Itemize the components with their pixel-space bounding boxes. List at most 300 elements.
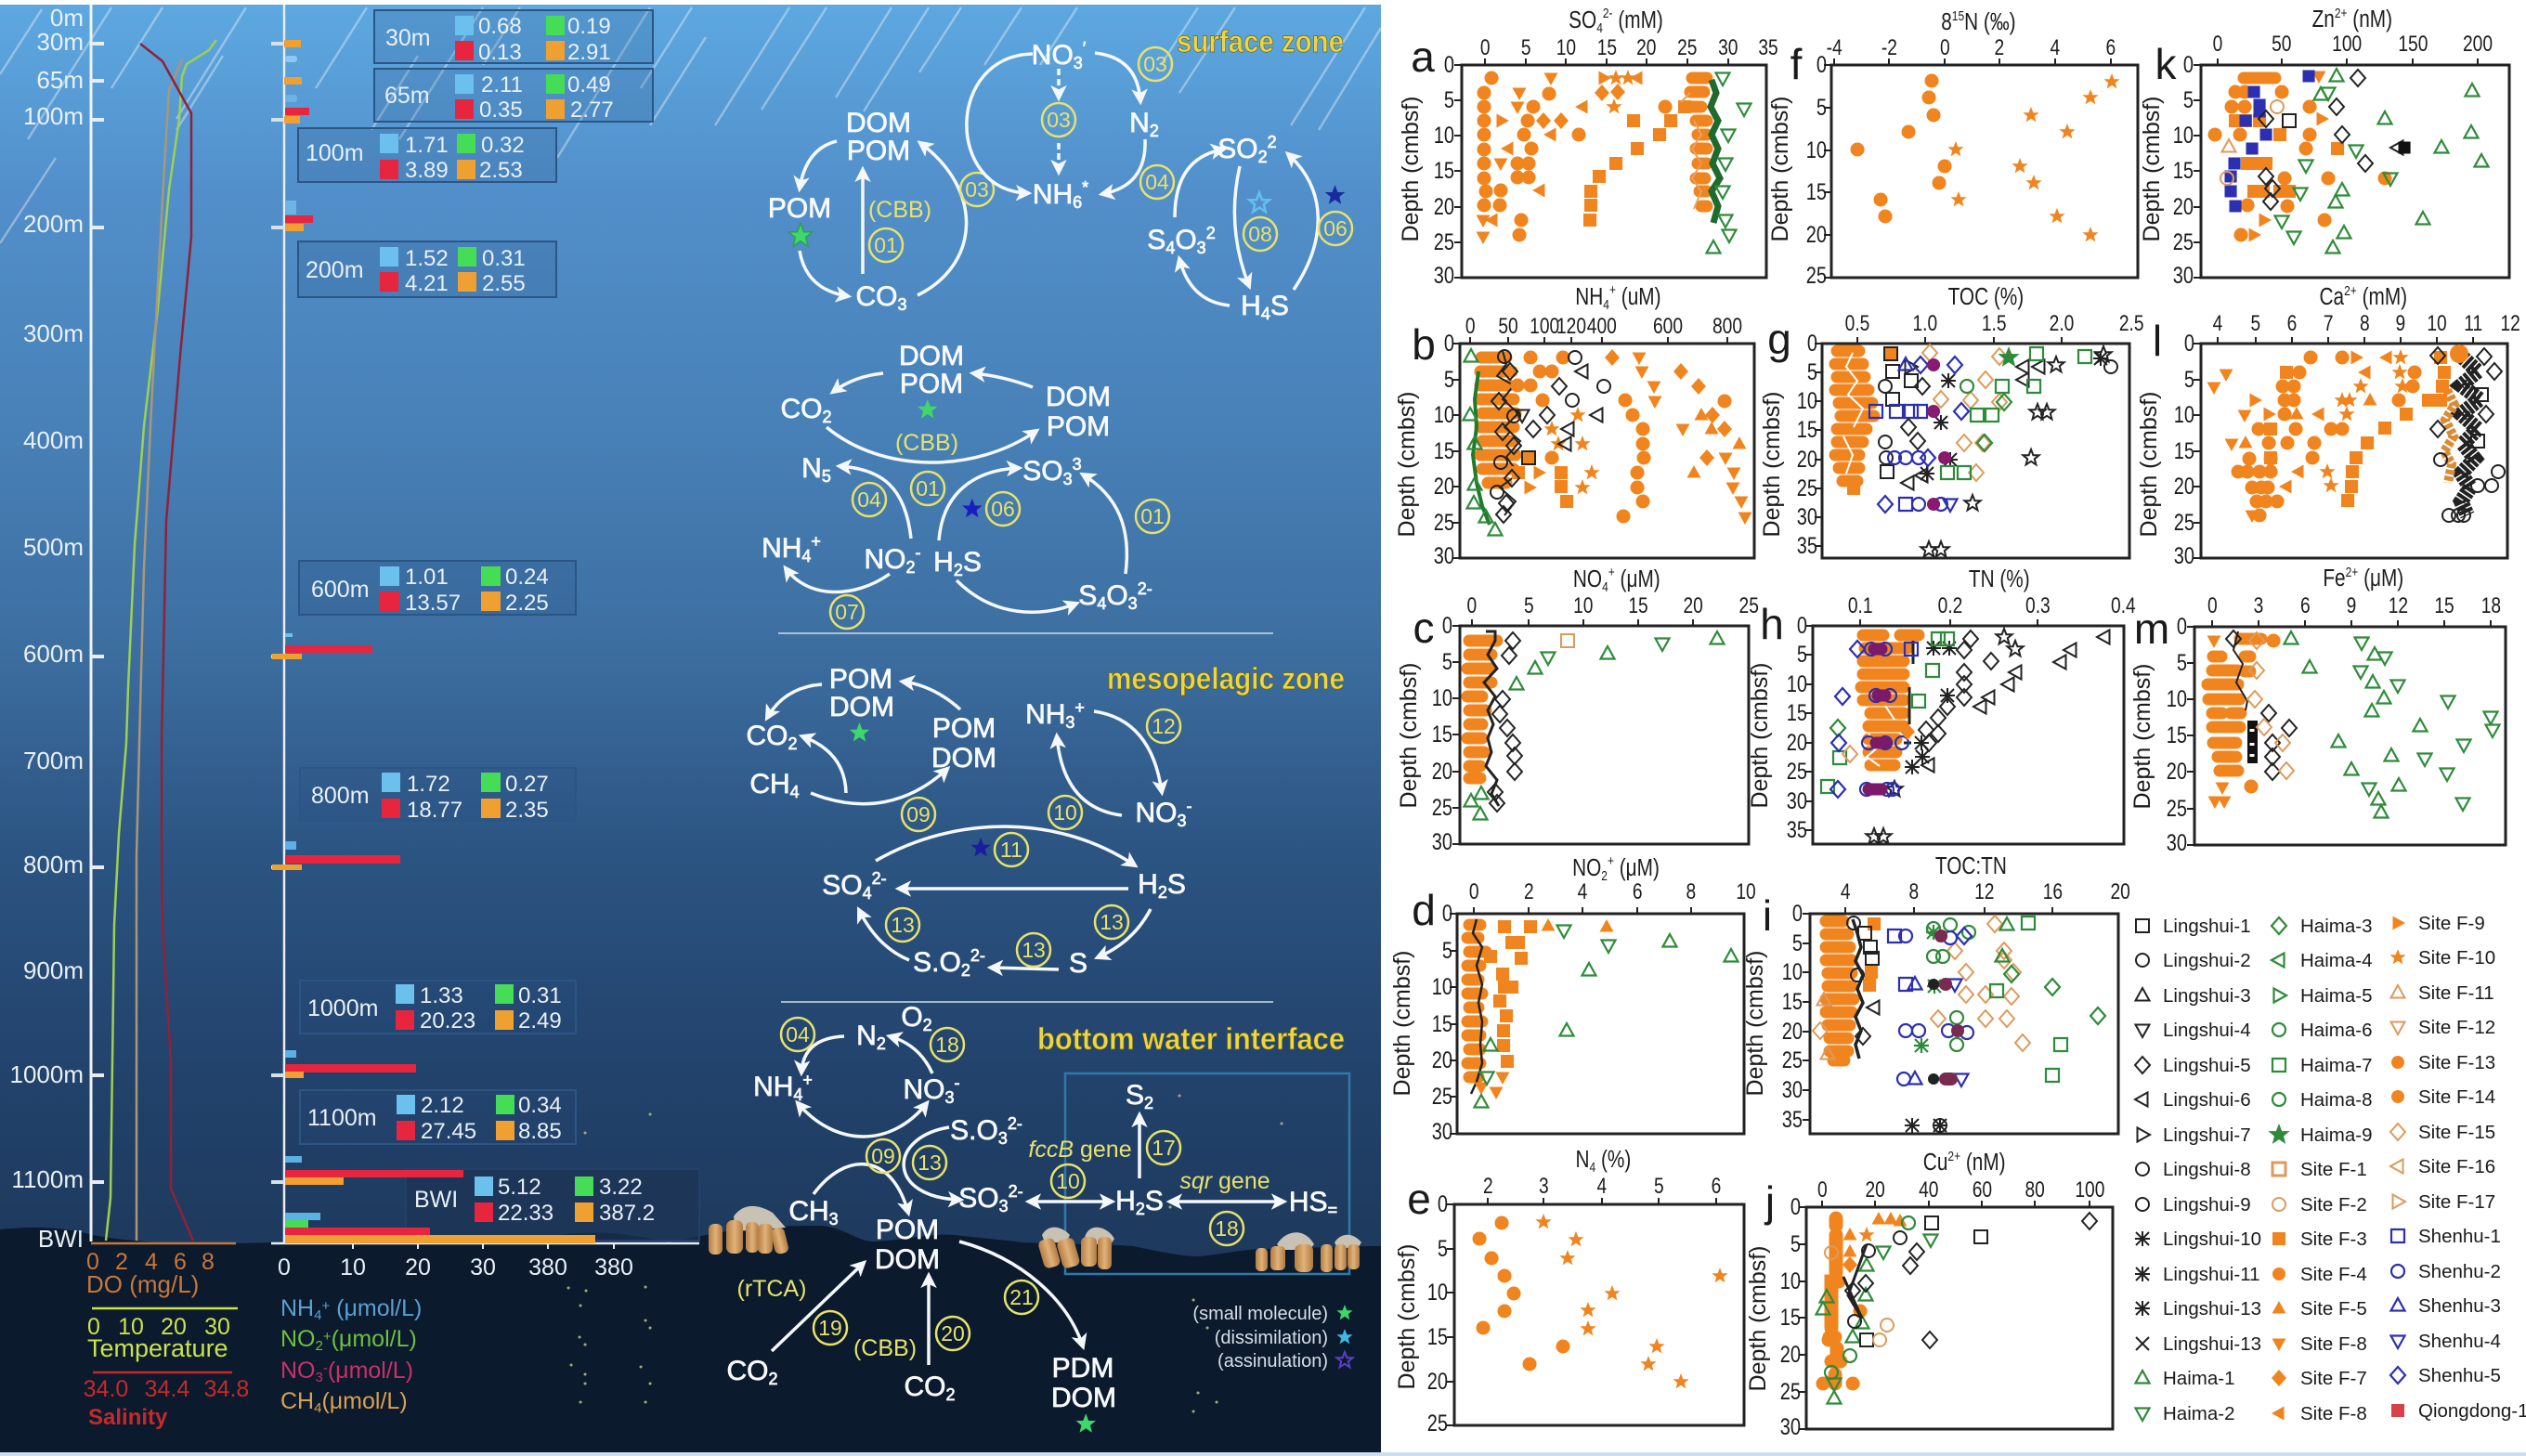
depth scale: 300m <box>23 319 84 347</box>
depth ticks: 15 <box>2174 438 2194 464</box>
icon: dissimilation star <box>1249 193 1270 212</box>
depth ticks: 10 <box>2174 402 2194 428</box>
axis text: 600 <box>1653 313 1683 339</box>
panel m: iron <box>2129 565 2506 856</box>
depth ticks: 10 <box>1434 402 1454 428</box>
step badges: 12 <box>1152 714 1176 738</box>
panel k: zinc <box>2139 6 2509 289</box>
depth ticks <box>2174 331 2194 569</box>
data box 1000m: 2.49 <box>518 1008 562 1034</box>
depth ticks: 0 <box>1790 1194 1801 1220</box>
step badges <box>781 1018 1243 1350</box>
axis text <box>1465 282 1742 339</box>
data box 1000m: 20.23 <box>420 1008 475 1034</box>
nutrient legend: NH <box>280 1295 314 1321</box>
data box 30m: 0.19 <box>567 14 611 39</box>
labels: NH <box>1025 699 1065 730</box>
labels: 2 <box>1144 1094 1153 1112</box>
axis text: 25 <box>1739 592 1759 618</box>
panel l: calcium <box>2136 283 2520 569</box>
legend column 1: Lingshui-3 <box>2163 985 2251 1007</box>
labels: S <box>963 547 982 578</box>
axis text: 2.0 <box>2050 310 2074 336</box>
chart frame <box>2201 65 2509 278</box>
step badges: 19 <box>818 1316 842 1340</box>
depth ticks: 20 <box>1780 1342 1801 1368</box>
axis text: 2 <box>1524 878 1534 904</box>
legend column 3: Site F-10 <box>2418 947 2495 968</box>
labels: 2 <box>954 561 963 579</box>
step badges <box>869 173 994 262</box>
depth scale: 800m <box>23 851 84 878</box>
icon: green star <box>1075 1413 1096 1433</box>
depth ticks: 30 <box>1782 1077 1803 1103</box>
labels: 2 <box>961 961 970 980</box>
depth ticks: 35 <box>1797 533 1817 559</box>
axis text: 6 <box>2105 34 2116 60</box>
depth ticks <box>1782 901 1803 1133</box>
legend column 2: Site F-1 <box>2300 1159 2367 1180</box>
depth ticks <box>1434 52 1454 289</box>
labels: 2 <box>905 558 916 577</box>
data points <box>2215 69 2489 253</box>
labels: 2 <box>822 408 832 426</box>
depth ticks: 10 <box>1434 123 1454 149</box>
axis text <box>2213 6 2493 57</box>
axis text: 0 <box>1940 34 1950 60</box>
depth ticks: 10 <box>1780 1268 1801 1294</box>
labels: sqr gene <box>1179 1168 1270 1194</box>
legend column 3: Shenhu-2 <box>2418 1261 2501 1282</box>
labels: POM <box>847 136 910 166</box>
axis text: 0.2 <box>1938 592 1962 618</box>
depth ticks: 20 <box>2167 759 2187 785</box>
axis text: 50 <box>1498 313 1518 339</box>
panel letter: c <box>1413 604 1434 652</box>
labels: CO <box>726 1356 768 1386</box>
axis text: TN (%) <box>1969 566 2030 592</box>
step badges: 20 <box>941 1321 965 1346</box>
labels: NO <box>1135 798 1177 828</box>
data box 200m: 200m <box>306 257 364 283</box>
step badges: 03 <box>1047 108 1071 132</box>
step badges: 06 <box>991 497 1015 521</box>
legend column 2: Site F-8 <box>2300 1333 2367 1355</box>
axis text <box>1848 566 2136 618</box>
labels: 6 <box>1073 193 1082 212</box>
panel letter: g <box>1767 315 1791 363</box>
depth ticks: 25 <box>1782 1047 1803 1073</box>
data box 1100m: 0.34 <box>518 1093 562 1118</box>
depth ticks: 20 <box>1797 447 1817 473</box>
nutrient bar chart: 380 <box>528 1254 567 1280</box>
salinity axis: 34.4 <box>145 1376 189 1402</box>
labels: 3 <box>1177 812 1187 830</box>
axis text: 0 <box>2207 592 2218 618</box>
y axis label: Depth (cmbsf) <box>1396 663 1422 808</box>
axis text: 2 <box>1994 34 2004 60</box>
depth ticks: 15 <box>2167 722 2187 748</box>
legend column 1: Lingshui-2 <box>2163 950 2251 971</box>
chart frame <box>2201 344 2507 558</box>
depth ticks: 10 <box>1432 974 1452 1000</box>
depth ticks: 30 <box>1797 504 1817 530</box>
depth ticks: 25 <box>1806 263 1827 289</box>
legend column 2: Site F-3 <box>2300 1228 2367 1250</box>
data box 100m <box>298 128 556 183</box>
axis text: 0 <box>1817 1176 1828 1202</box>
step badges <box>1243 212 1352 251</box>
temperature axis <box>87 1308 238 1362</box>
axis text: 25 <box>1677 34 1697 60</box>
panel j: copper <box>1745 1149 2113 1440</box>
legend column 1: Lingshui-6 <box>2163 1089 2251 1111</box>
axis text: 80 <box>2025 1176 2045 1202</box>
zone title: bottom water interface: bottom water interface <box>1037 1021 1345 1056</box>
depth scale: 100m <box>23 102 84 130</box>
depth scale: 30m <box>36 28 84 56</box>
labels: S <box>1270 291 1289 321</box>
axis text: NO <box>1573 566 1602 592</box>
legend column 2: Site F-5 <box>2300 1298 2367 1320</box>
labels: 2 <box>1206 224 1216 242</box>
arrows <box>767 682 1162 969</box>
axis text: 8 <box>1941 8 1952 35</box>
step badges: 08 <box>1248 222 1272 246</box>
labels: SO <box>1022 456 1063 487</box>
labels: NH <box>1033 179 1073 210</box>
step badges: 04 <box>857 488 881 512</box>
axis text: 8 <box>1686 878 1696 904</box>
nutrient bar chart: 380 <box>594 1254 633 1280</box>
axis text: 0 <box>2213 31 2222 57</box>
axis text <box>2213 283 2520 336</box>
data points <box>1835 344 2117 556</box>
chart frame <box>1460 344 1754 558</box>
salinity axis: Salinity <box>88 1405 168 1430</box>
data box 1100m: 27.45 <box>421 1119 476 1144</box>
axis text: 15 <box>1628 592 1648 618</box>
depth ticks: 15 <box>1432 1011 1452 1037</box>
depth ticks: 0 <box>1816 52 1827 78</box>
labels: 3 <box>1073 455 1082 474</box>
axis text: (mM) <box>1613 6 1663 33</box>
axis text: 9 <box>2395 310 2405 336</box>
legend column 2: Haima-5 <box>2300 985 2372 1007</box>
axis text: 4 <box>1590 1160 1596 1175</box>
labels: 4 <box>1261 305 1270 323</box>
chart frame <box>1813 626 2124 844</box>
axis text: 12 <box>1974 878 1994 904</box>
data box 30m: 30m <box>385 25 431 51</box>
legend column 1: Lingshui-13 <box>2163 1333 2261 1355</box>
y axis label: Depth (cmbsf) <box>1394 1244 1420 1389</box>
axis text: 10 <box>1573 592 1593 618</box>
depth ticks: 5 <box>1790 1231 1801 1257</box>
labels: H <box>1115 1186 1136 1216</box>
depth scale: 0m <box>50 4 84 32</box>
depth ticks: 15 <box>1427 1324 1448 1350</box>
data box 1100m: 2.12 <box>421 1093 464 1118</box>
depth ticks: 0 <box>2177 614 2187 640</box>
data box 600m: 2.25 <box>505 591 549 616</box>
depth ticks: 10 <box>1432 685 1452 711</box>
data points <box>2207 347 2505 523</box>
depth ticks: 5 <box>1797 642 1807 668</box>
data box 65m: 2.77 <box>570 98 614 123</box>
axis text <box>2207 565 2501 618</box>
labels: 4 <box>1097 594 1106 613</box>
labels <box>768 108 931 314</box>
labels: 2 <box>1136 1200 1145 1218</box>
labels: SO <box>822 870 863 901</box>
DO axis <box>86 1243 236 1298</box>
axis text: 0.1 <box>1848 592 1873 618</box>
legend column 3: Site F-14 <box>2418 1086 2495 1108</box>
axis text: (%) <box>1595 1146 1631 1173</box>
data box 30m: 0.68 <box>478 14 522 39</box>
legend column 3: Site F-17 <box>2418 1191 2495 1213</box>
labels: fccB gene <box>1028 1137 1132 1163</box>
nutrient bar chart <box>271 5 699 1280</box>
panel i: TOC to TN ratio <box>1742 852 2130 1134</box>
legend column 2: Site F-7 <box>2300 1368 2367 1389</box>
legend column 2: Site F-2 <box>2300 1194 2367 1216</box>
nutrient legend: + <box>321 1298 330 1314</box>
nutrient legend: (μmol/L) <box>330 1295 422 1321</box>
step badges: 10 <box>1053 800 1077 825</box>
nutrient legend: (μmol/L) <box>328 1358 413 1384</box>
axis text: 100 <box>1530 313 1559 339</box>
data box 100m: 1.71 <box>405 133 449 158</box>
axis text: TOC:TN <box>1935 852 2007 879</box>
legend column 3: Site F-12 <box>2418 1017 2495 1038</box>
axis text: (nM) <box>2348 6 2392 32</box>
temperature axis: 10 <box>118 1314 144 1340</box>
y axis label: Depth (cmbsf) <box>2136 392 2162 537</box>
axis text: 2- <box>1603 6 1613 20</box>
step badges: 04 <box>786 1022 810 1046</box>
labels: H <box>1138 869 1158 900</box>
panel letter: k <box>2155 40 2177 88</box>
depth ticks: 10 <box>2173 123 2194 149</box>
data box 200m: 0.31 <box>482 246 526 271</box>
labels: S <box>1078 580 1097 611</box>
axis text: 16 <box>2043 878 2063 904</box>
worm cluster center <box>1037 1228 1114 1269</box>
depth ticks: 10 <box>1427 1280 1448 1306</box>
star legend: (dissimilation) <box>1215 1328 1328 1348</box>
labels: DOM <box>1051 1383 1116 1413</box>
labels: SO <box>958 1183 999 1214</box>
labels: CH <box>749 769 790 800</box>
depth scale: 400m <box>23 426 84 454</box>
axis text: 12 <box>2501 310 2520 336</box>
chart frame <box>1810 914 2118 1134</box>
depth scale: 700m <box>23 747 84 774</box>
axis text: 1.0 <box>1912 310 1937 336</box>
depth ticks: 20 <box>2174 474 2194 500</box>
depth ticks: 15 <box>1434 438 1454 464</box>
labels: H <box>933 547 954 578</box>
panel a: sulfate <box>1398 6 1778 289</box>
labels: 2 <box>877 1034 886 1053</box>
depth ticks: 5 <box>2183 87 2194 113</box>
depth ticks <box>1432 901 1452 1145</box>
depth scale: 900m <box>23 956 84 984</box>
depth ticks: 25 <box>1434 229 1454 255</box>
axis text: 18 <box>2481 592 2501 618</box>
panel b: ammonium <box>1394 282 1754 569</box>
nutrient bar chart: 20 <box>405 1254 431 1280</box>
legend column 3 <box>2389 913 2526 1422</box>
depth ticks: 0 <box>1807 331 1817 357</box>
data box 100m: 0.32 <box>481 133 525 158</box>
data box 800m: 18.77 <box>407 798 462 823</box>
axis text: (μM) <box>1614 854 1660 881</box>
surface pathway: sulfur cycle <box>1147 133 1352 323</box>
labels: 2- <box>970 946 985 965</box>
step badges: 01 <box>874 233 898 257</box>
temperature line <box>106 40 216 1241</box>
labels: N <box>856 1020 877 1051</box>
icon: green star <box>918 399 938 418</box>
axis text: 2+ <box>1947 1149 1960 1164</box>
mesopelagic pathway cluster <box>746 664 1192 980</box>
axis text: SO <box>1569 6 1596 33</box>
nutrient bar chart: 10 <box>340 1254 366 1280</box>
depth ticks: 35 <box>1782 1107 1803 1133</box>
labels: S <box>1145 1186 1164 1216</box>
panel letter: f <box>1790 40 1803 88</box>
panel letter: d <box>1412 886 1436 934</box>
panel letter: h <box>1760 600 1784 648</box>
labels: 2- <box>1138 579 1152 598</box>
labels: S.O <box>950 1115 998 1146</box>
step badges: 09 <box>871 1144 895 1168</box>
data box 1100m: 8.85 <box>518 1119 562 1144</box>
labels: 3 <box>998 1129 1008 1148</box>
chart frame <box>1822 344 2129 558</box>
nutrient legend: NO <box>280 1358 316 1384</box>
depth ticks: 0 <box>1442 613 1452 639</box>
step badges: 04 <box>1145 170 1169 194</box>
data points <box>1477 70 1751 253</box>
labels: DOM <box>899 341 964 371</box>
data box BWI: 387.2 <box>599 1201 655 1226</box>
data box 800m: 1.72 <box>407 772 450 797</box>
depth ticks: 20 <box>1434 474 1454 500</box>
legend column 2: Haima-3 <box>2300 916 2372 937</box>
star legend: (assinulation) <box>1217 1351 1328 1372</box>
labels: 3 <box>1128 594 1138 613</box>
depth ticks: 25 <box>1432 795 1452 821</box>
labels: CO <box>746 721 788 751</box>
labels: * <box>1082 178 1088 197</box>
salinity axis <box>84 1372 249 1430</box>
arrows <box>967 53 1145 194</box>
step badges: 18 <box>1215 1216 1239 1241</box>
depth ticks: 15 <box>1782 989 1803 1015</box>
labels <box>1032 39 1159 212</box>
star legend <box>1192 1304 1353 1372</box>
legend column 1: Lingshui-7 <box>2163 1124 2251 1146</box>
axis text: 20 <box>1636 34 1656 60</box>
data box 1100m: 1100m <box>307 1105 377 1131</box>
labels: 4 <box>790 783 800 801</box>
labels: S <box>1126 1080 1144 1111</box>
arrows <box>786 373 1126 612</box>
zone divider lines <box>778 633 1273 1002</box>
axis text: 20 <box>1684 592 1703 618</box>
labels: 2- <box>1009 1182 1023 1201</box>
data box 65m: 2.11 <box>481 72 523 98</box>
depth ticks: 20 <box>1806 222 1827 248</box>
depth ticks: 25 <box>1797 475 1817 501</box>
labels: - <box>1187 797 1192 815</box>
salinity line <box>140 44 193 1241</box>
depth ticks: 10 <box>1797 388 1817 414</box>
data box 65m: 65m <box>384 83 430 109</box>
panel letter: i <box>1763 891 1772 940</box>
nutrient legend: - <box>323 1360 328 1376</box>
data box 65m: 0.49 <box>567 72 611 98</box>
data points <box>1479 1214 1728 1388</box>
labels: POM <box>1047 411 1110 442</box>
nutrient legend: NO <box>280 1326 316 1352</box>
chart frame <box>1831 65 2138 278</box>
depth ticks: 0 <box>1797 613 1807 639</box>
data box 800m: 0.27 <box>505 772 549 797</box>
data box 30m <box>374 10 653 65</box>
bottom pathway cluster <box>726 1002 1337 1433</box>
data box 65m <box>374 69 653 123</box>
labels: NH <box>762 533 801 564</box>
legend column 1: Haima-2 <box>2163 1403 2234 1424</box>
depth ticks: 10 <box>2167 686 2187 712</box>
labels: N <box>801 453 822 484</box>
labels: H <box>1241 291 1261 321</box>
axis text: Ca <box>2320 283 2344 310</box>
temperature axis: 30 <box>204 1314 230 1340</box>
axis text: 200 <box>2463 31 2493 57</box>
axis text: 10 <box>2427 310 2447 336</box>
data box BWI: 3.22 <box>599 1175 643 1200</box>
step badges <box>886 709 1180 967</box>
labels: POM <box>829 664 892 695</box>
depth scale: 500m <box>23 533 84 561</box>
labels: S <box>1069 948 1087 979</box>
depth ticks: 20 <box>1787 730 1807 756</box>
axis text: 10 <box>1556 34 1576 60</box>
depth ticks <box>2167 614 2187 856</box>
axis text: 35 <box>1758 34 1778 60</box>
panel c: nitrate <box>1396 565 1759 855</box>
chart frame <box>1806 1207 2113 1429</box>
axis text: (μM) <box>1615 566 1660 592</box>
legend column 1: Lingshui-1 <box>2163 916 2251 937</box>
y axis label: Depth (cmbsf) <box>2129 664 2155 809</box>
axis text: 12 <box>2389 592 2408 618</box>
labels: 2- <box>1008 1114 1022 1133</box>
depth ticks: 5 <box>1442 938 1452 964</box>
labels: NH <box>753 1072 793 1102</box>
step badges: 21 <box>1009 1285 1034 1309</box>
data points <box>1464 631 1724 819</box>
axis text: + <box>1609 282 1616 297</box>
axis text: 2+ <box>2344 283 2357 298</box>
labels <box>762 341 1152 613</box>
